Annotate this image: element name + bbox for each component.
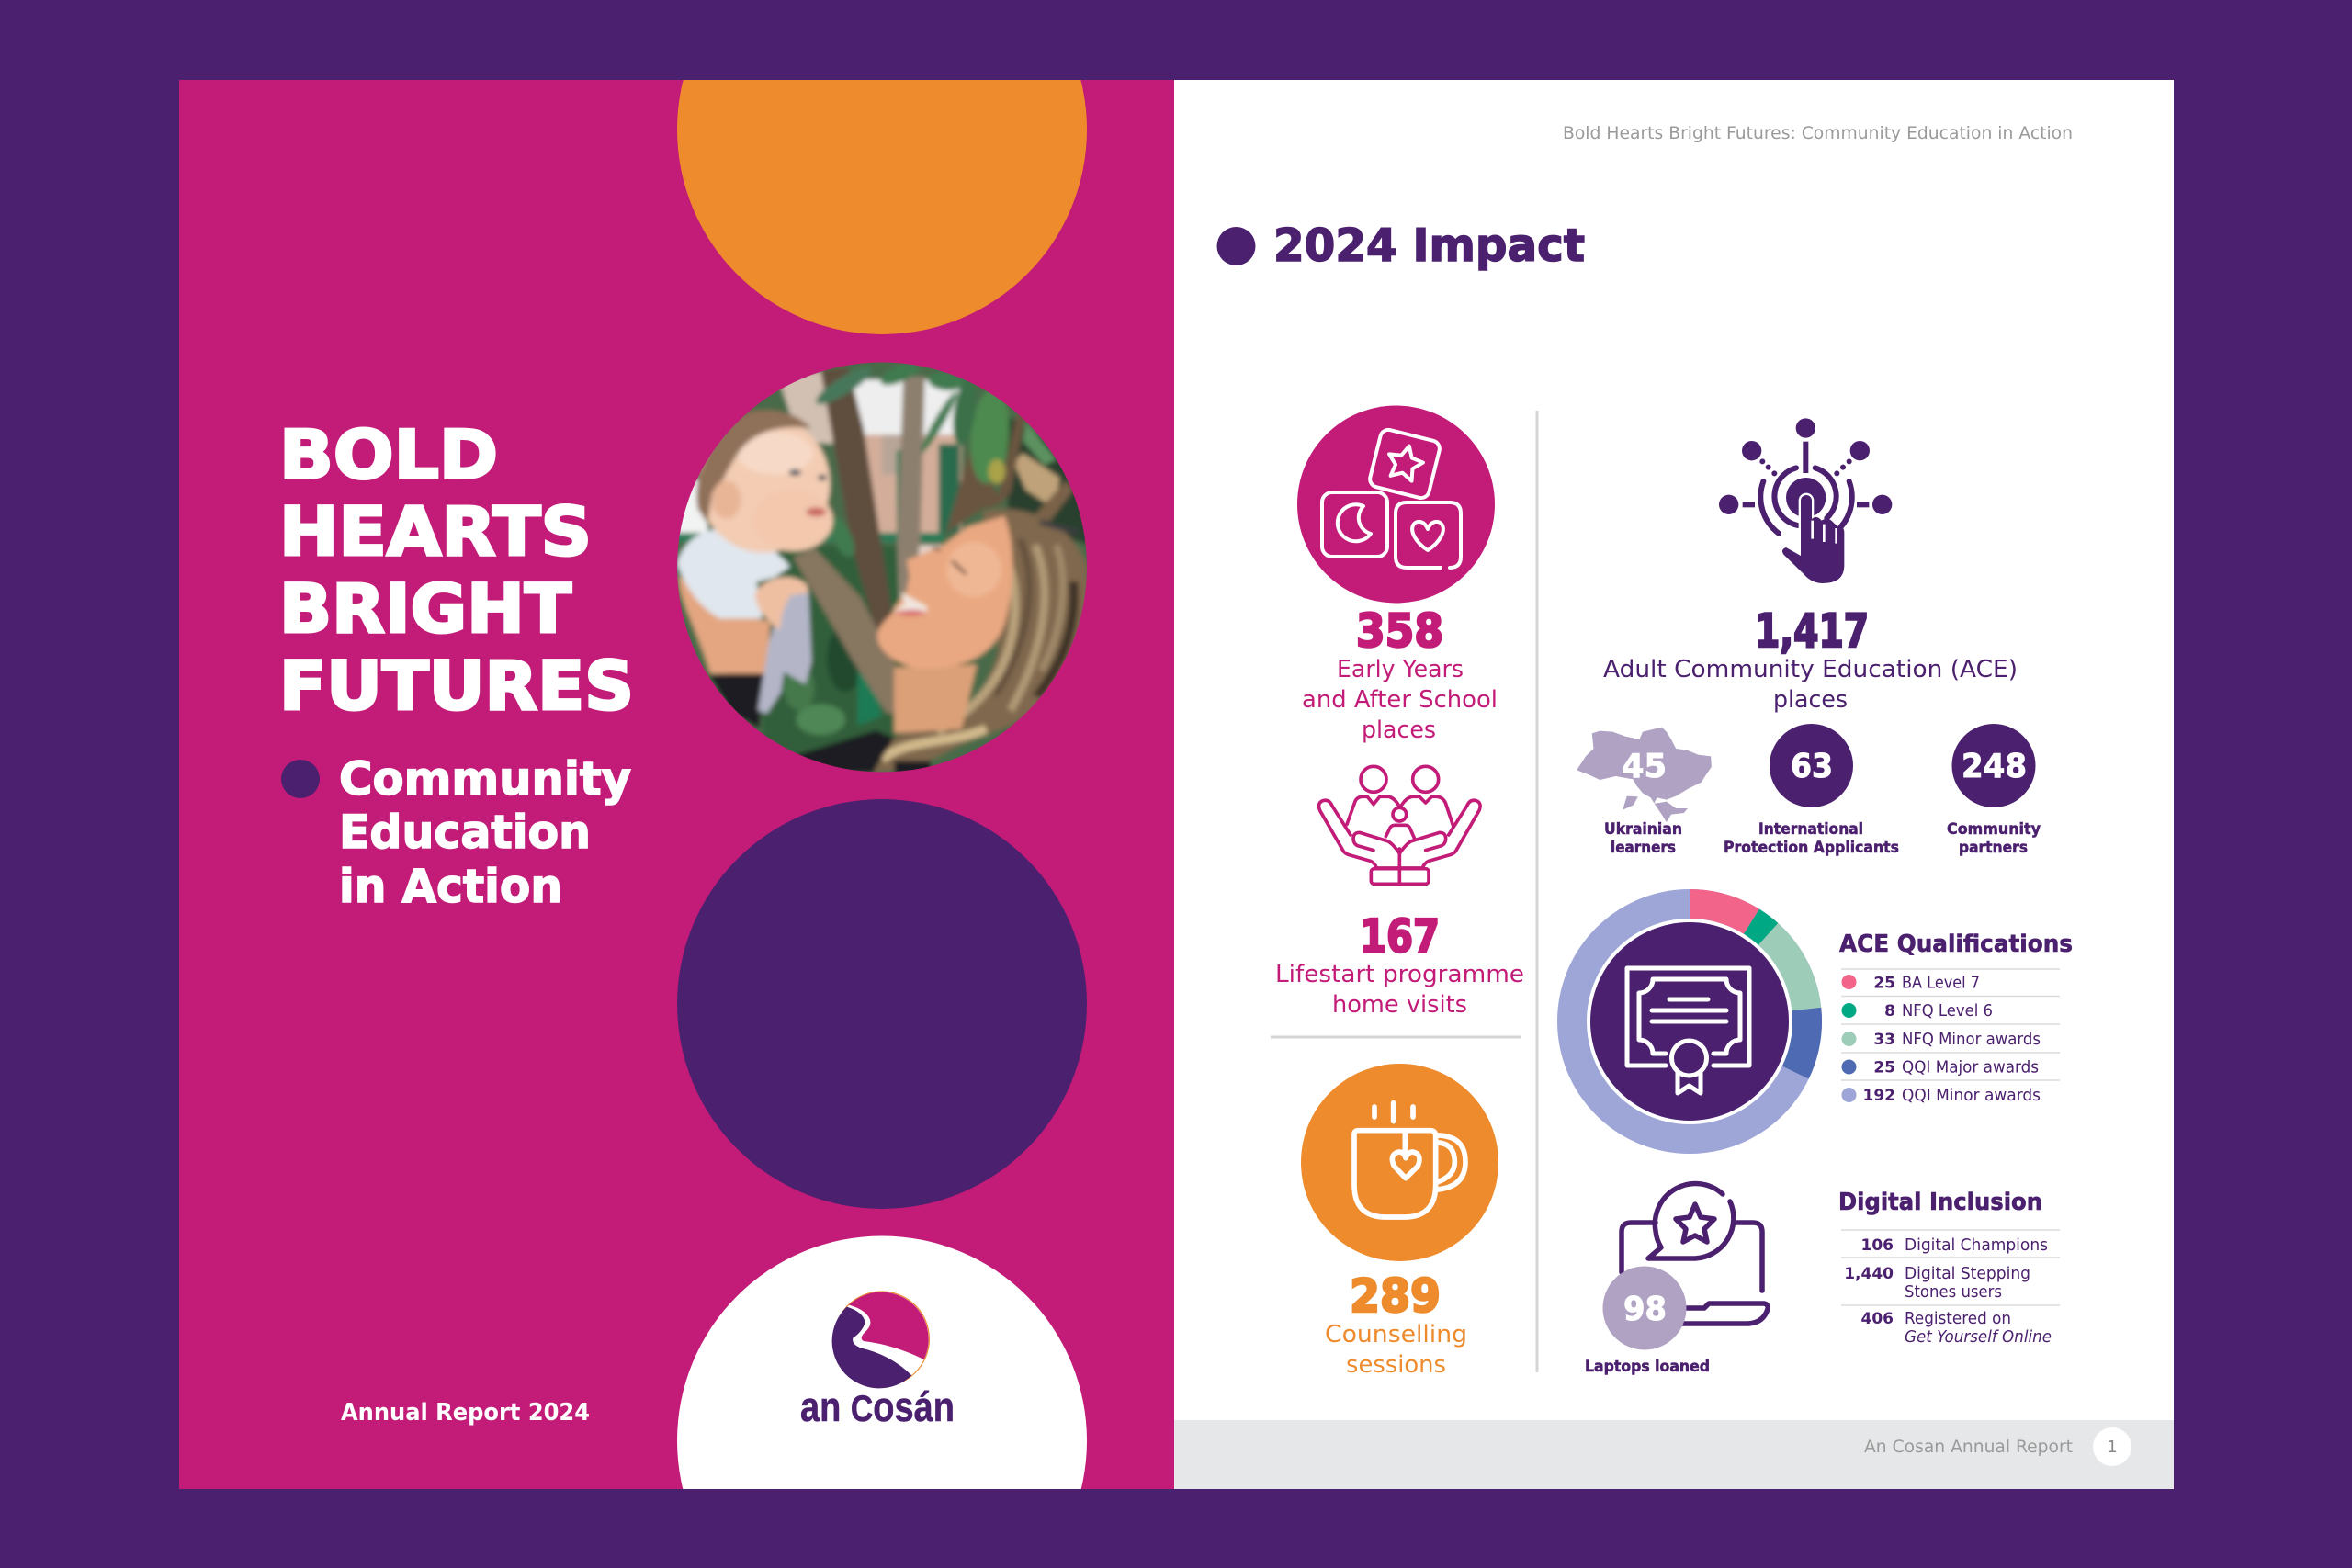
caption: laptops loaned: Laptops loaned xyxy=(1585,1358,1710,1376)
legend row: QQI Minor awards: QQI Minor awards xyxy=(1902,1086,2041,1105)
legend row: NFQ Minor awards: NFQ Minor awards xyxy=(1902,1030,2041,1049)
stat: international protection applicants xyxy=(1724,724,1899,857)
legend row: QQI Minor awards: 192 xyxy=(1863,1087,1895,1105)
row: get yourself online: Get Yourself Online xyxy=(1905,1327,2052,1347)
panel: left cover page xyxy=(179,80,1174,1489)
number: 289: 289 xyxy=(1350,1269,1441,1323)
title: Bold Hearts Bright Futures: HEARTS xyxy=(279,493,592,571)
subtitle: Community Education in Action: Education xyxy=(339,806,591,859)
title: Bold Hearts Bright Futures: BRIGHT xyxy=(279,570,571,649)
legend row: NFQ Level 6: 8 xyxy=(1884,1002,1895,1021)
heading: ACE Qualifications: ACE Qualifications xyxy=(1839,931,2073,958)
row: digital stepping stones: Stones users xyxy=(1905,1282,2002,1302)
caption: early years places xyxy=(1302,656,1498,744)
icon: certificate xyxy=(1590,922,1789,1121)
purple circle xyxy=(677,799,1087,1209)
subtitle: Community Education in Action: Community xyxy=(339,752,631,806)
legend row: QQI Major awards xyxy=(1841,1058,2039,1077)
row: digital stepping stones xyxy=(1844,1264,2030,1302)
orange circle xyxy=(677,80,1087,334)
legend row: NFQ Level 6 xyxy=(1841,1001,1993,1021)
badge: 98 xyxy=(1602,1266,1687,1350)
subtitle: Community Education in Action xyxy=(339,752,631,913)
number badge: 63: 63 xyxy=(1791,748,1833,785)
heading: 2024 Impact: 2024 Impact xyxy=(1273,220,1585,272)
caption: community partners: partners xyxy=(1959,839,2028,857)
badge: 98: 98 xyxy=(1623,1291,1667,1328)
legend row: BA Level 7: BA Level 7 xyxy=(1902,974,1980,992)
photo: mother lifting baby xyxy=(677,362,1087,772)
title: Bold Hearts Bright Futures xyxy=(279,417,634,726)
caption: protection applicants: International xyxy=(1758,820,1863,839)
number: 167: 167 xyxy=(1360,909,1440,963)
caption: ACE places: Adult Community Education (ACE) xyxy=(1603,656,2018,683)
row: get yourself online: 406 xyxy=(1861,1310,1894,1328)
legend row: QQI Major awards: 25 xyxy=(1873,1058,1895,1077)
caption: protection applicants xyxy=(1724,820,1899,857)
row: digital champions: Digital Champions xyxy=(1905,1235,2048,1255)
row: digital stepping stones: 1,440 xyxy=(1844,1265,1894,1283)
icon: Ukraine map xyxy=(1577,728,1712,822)
caption: protection applicants: Protection Applicants xyxy=(1724,839,1899,857)
caption: early years places: places xyxy=(1362,716,1436,744)
caption: counselling sessions xyxy=(1325,1321,1467,1379)
page number badge xyxy=(2093,1427,2132,1466)
number badge: 248 xyxy=(1951,724,2036,807)
list: digital inclusion xyxy=(1841,1230,2060,1347)
caption: ukrainian learners xyxy=(1604,820,1682,857)
stat: community partners xyxy=(1947,724,2041,857)
tree trunks xyxy=(820,367,893,631)
logo: An Cosán: an Cosán xyxy=(800,1383,955,1430)
baby xyxy=(709,671,764,728)
caption: ACE places: places xyxy=(1773,686,1848,714)
icon: family in hands xyxy=(1319,766,1480,884)
annual report label: Annual Report 2024 xyxy=(341,1399,590,1427)
woman xyxy=(870,509,1088,773)
legend row: NFQ Minor awards xyxy=(1841,1030,2041,1049)
caption: community partners xyxy=(1947,820,2041,857)
icon: laptop with star bubble xyxy=(1602,1184,1768,1350)
leaves xyxy=(967,388,1012,485)
donut chart: ACE qualifications xyxy=(1572,904,1807,1139)
number badge: 248: 248 xyxy=(1962,748,2027,785)
legend row: NFQ Minor awards: 33 xyxy=(1873,1031,1895,1049)
stat: early years xyxy=(1297,406,1498,744)
legend row: QQI Minor awards xyxy=(1841,1086,2041,1105)
icon: mug with heart tag xyxy=(1301,1064,1498,1261)
white logo circle xyxy=(677,1236,1087,1489)
row: digital champions: 106 xyxy=(1861,1236,1894,1255)
legend row: QQI Major awards: QQI Major awards xyxy=(1902,1058,2039,1077)
caption: counselling sessions: Counselling xyxy=(1325,1321,1467,1348)
legend row: BA Level 7 xyxy=(1841,974,1980,992)
legend row: BA Level 7: 25 xyxy=(1873,974,1895,992)
page number badge: 1 xyxy=(2107,1438,2118,1457)
title: Bold Hearts Bright Futures: BOLD xyxy=(279,417,498,494)
caption: counselling sessions: sessions xyxy=(1346,1351,1446,1379)
row: get yourself online: Registered on xyxy=(1905,1309,2011,1328)
footer text: An Cosan Annual Report xyxy=(1864,1437,2073,1457)
caption: lifestart visits: Lifestart programme xyxy=(1275,961,1524,988)
icon: toy blocks xyxy=(1297,406,1495,603)
number: 358: 358 xyxy=(1356,604,1443,658)
row: digital stepping stones: Digital Stepping xyxy=(1905,1264,2030,1283)
stat: lifestart xyxy=(1275,766,1524,1019)
number badge: 63 xyxy=(1770,724,1853,807)
logo: An Cosán xyxy=(800,1291,955,1430)
footer band xyxy=(1174,1420,2174,1489)
legend: ACE qualifications xyxy=(1841,969,2060,1105)
caption: ukrainian learners: learners xyxy=(1611,839,1676,857)
icon: touch network xyxy=(1719,418,1892,583)
row: get yourself online xyxy=(1861,1309,2052,1347)
caption: early years places: Early Years xyxy=(1337,656,1464,683)
caption: early years places: and After School xyxy=(1302,686,1498,714)
running header: Bold Hearts Bright Futures: Community Education in Action xyxy=(1563,123,2073,143)
caption: ukrainian learners: Ukrainian xyxy=(1604,820,1682,839)
stat: ukrainian learners xyxy=(1577,728,1712,857)
panel: right impact page xyxy=(1174,80,2174,1489)
number: 45: 45 xyxy=(1622,748,1667,785)
caption: ACE places xyxy=(1603,656,2018,714)
legend row: NFQ Level 6: NFQ Level 6 xyxy=(1902,1001,1993,1021)
caption: lifestart visits xyxy=(1275,961,1524,1019)
subtitle: Community Education in Action: in Action xyxy=(339,860,562,913)
bullet dot xyxy=(281,760,320,798)
number: 1,417: 1,417 xyxy=(1755,604,1869,658)
stat: adult community education xyxy=(1603,418,2018,714)
stat: counselling xyxy=(1301,1064,1498,1379)
heading: Digital Inclusion: Digital Inclusion xyxy=(1838,1189,2042,1216)
title: Bold Hearts Bright Futures: FUTURES xyxy=(279,648,634,726)
caption: lifestart visits: home visits xyxy=(1332,991,1467,1019)
caption: community partners: Community xyxy=(1947,820,2041,839)
